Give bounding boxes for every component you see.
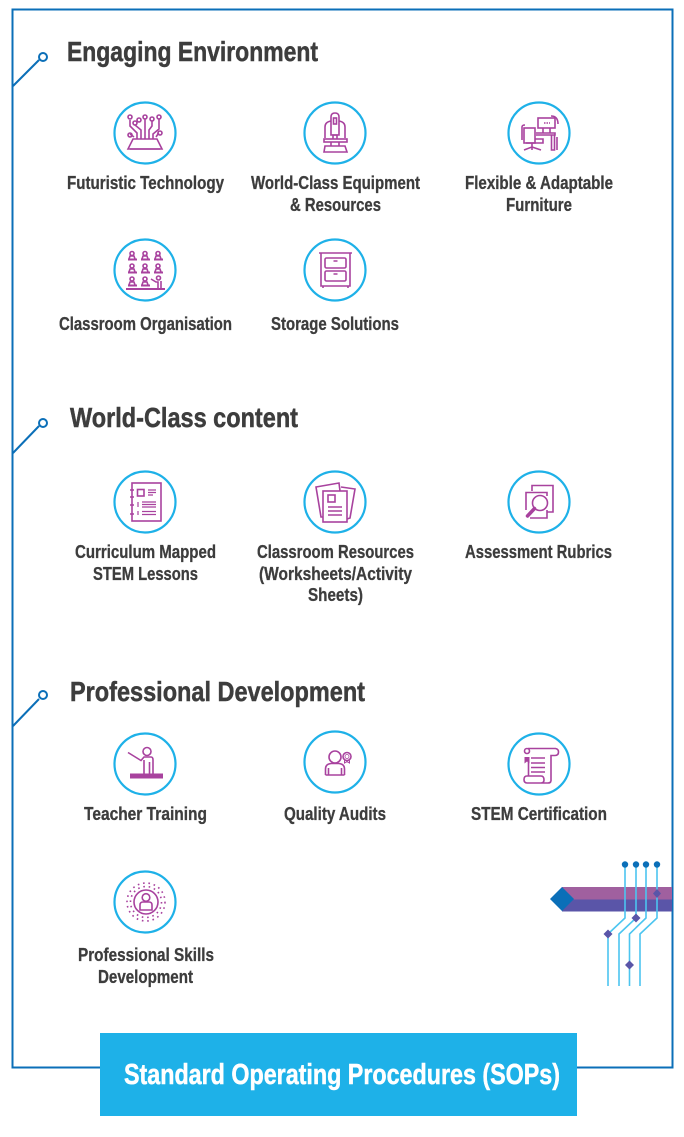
item: futuristic technology <box>67 102 224 193</box>
label: Professional Skills <box>78 945 214 965</box>
item: quality audits <box>284 732 386 824</box>
connector marker <box>13 419 47 453</box>
item: classroom organisation <box>59 240 232 334</box>
item: stem certification <box>471 734 607 824</box>
label <box>257 542 414 605</box>
panel: world-class content <box>13 402 612 605</box>
label: Classroom Organisation <box>59 314 232 334</box>
panel: professional development <box>13 676 607 987</box>
icon: notebook <box>130 483 161 521</box>
item: professional skills development <box>78 872 214 987</box>
label: & Resources <box>290 195 381 215</box>
item: assessment rubrics <box>465 472 612 562</box>
item: world-class equipment <box>251 102 420 215</box>
icon: stacked documents <box>316 483 355 522</box>
item: classroom resources <box>257 472 414 605</box>
icon: certificate scroll <box>524 748 558 783</box>
item: storage solutions <box>271 240 399 334</box>
icon: classroom rows <box>126 252 165 290</box>
icon: person with rosette <box>326 751 351 775</box>
label: Sheets) <box>308 585 363 605</box>
item: flexible furniture <box>465 102 613 215</box>
label: Assessment Rubrics <box>465 542 612 562</box>
icon: person in dotted halo <box>127 883 165 921</box>
label: Development <box>98 967 193 987</box>
rosette ribbon <box>524 757 530 764</box>
label: Curriculum Mapped <box>75 542 216 562</box>
label: (Worksheets/Activity <box>259 564 412 584</box>
label <box>465 173 613 215</box>
label <box>78 945 214 987</box>
icon: microscope <box>324 113 347 152</box>
label <box>251 173 420 215</box>
item: curriculum mapped lessons <box>75 472 216 584</box>
label: Classroom Resources <box>257 542 414 562</box>
label: STEM Lessons <box>93 564 198 584</box>
heading: Engaging Environment <box>67 36 318 67</box>
icon: desk and chair <box>522 116 558 150</box>
connector marker <box>13 691 47 726</box>
icon: teacher at podium <box>128 748 163 778</box>
icon: cabinet <box>319 253 352 288</box>
heading: Professional Development <box>70 676 365 707</box>
label: Futuristic Technology <box>67 173 224 193</box>
panel: engaging environment <box>13 36 613 334</box>
label: Furniture <box>506 195 572 215</box>
item: teacher training <box>84 734 207 824</box>
label: STEM Certification <box>471 804 607 824</box>
banner: standard operating procedures: Standard Operating Procedures (SOPs) <box>124 1059 560 1091</box>
decoration: circuit pencil <box>550 861 672 986</box>
connector marker <box>13 53 47 86</box>
icon: magnifier over documents <box>526 486 553 518</box>
label <box>75 542 216 584</box>
label: Quality Audits <box>284 804 386 824</box>
heading: World-Class content <box>70 402 298 433</box>
icon: circuit chip <box>128 115 162 149</box>
label: Flexible & Adaptable <box>465 173 613 193</box>
label: Storage Solutions <box>271 314 399 334</box>
label: World-Class Equipment <box>251 173 420 193</box>
banner: standard operating procedures <box>100 1033 577 1116</box>
label: Teacher Training <box>84 804 207 824</box>
